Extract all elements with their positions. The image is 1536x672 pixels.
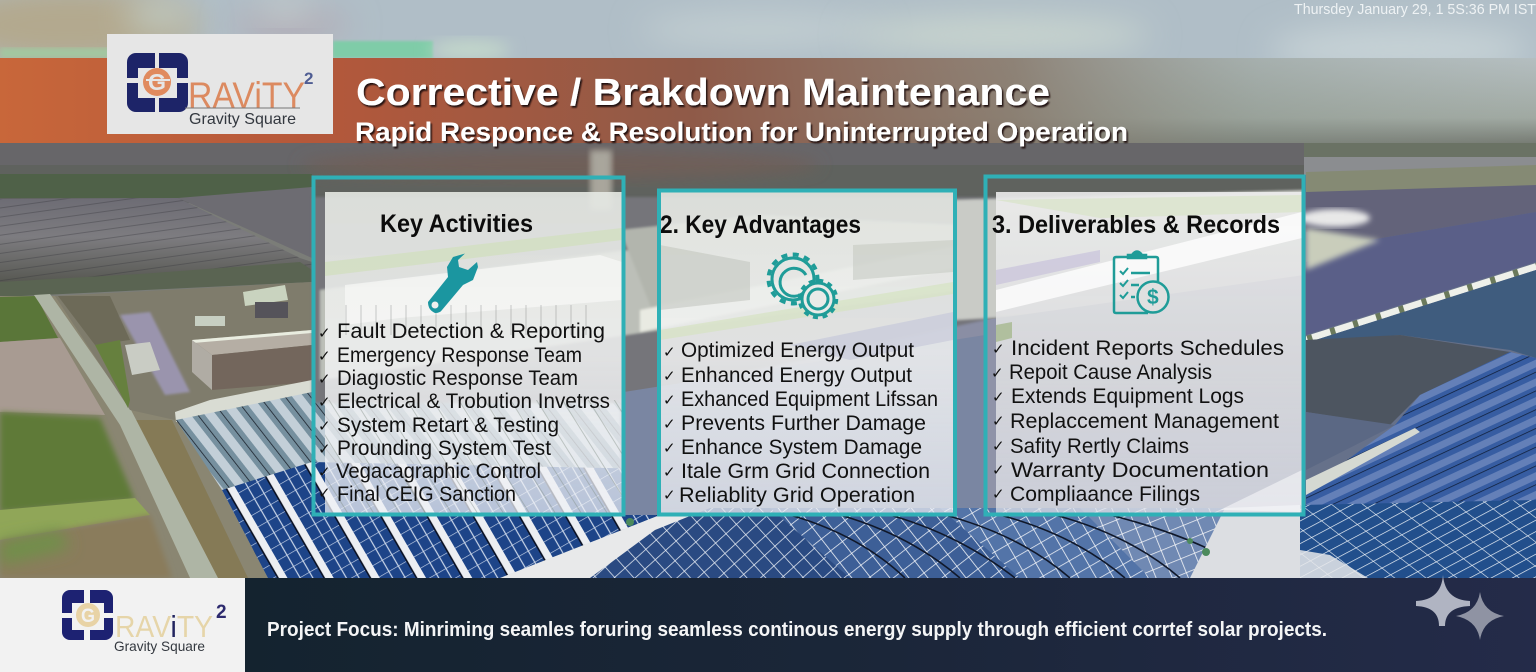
icon: clipboard with dollar: $ — [1147, 286, 1159, 309]
list: activities: ✓ — [318, 393, 331, 411]
list: advantages: Exhanced Equipment Lifssan — [681, 388, 938, 411]
list: activities: ✓ — [318, 324, 331, 342]
list: deliverables: ✓ — [992, 437, 1005, 455]
list: activities: ✓ — [318, 370, 331, 388]
panel: key advantages — [659, 190, 955, 514]
list: deliverables: Replaccement Management — [1010, 410, 1279, 433]
list: activities: Fault Detection & Reporting — [337, 320, 605, 343]
list: deliverables: ✓ — [992, 388, 1005, 406]
footer emblem — [62, 590, 113, 640]
list: activities: Diagıostic Response Team — [337, 367, 578, 390]
footer emblem: G — [81, 606, 95, 627]
icon: gears — [768, 254, 836, 318]
list: activities: System Retart & Testing — [337, 414, 559, 437]
logo name: Gravity Square — [189, 111, 296, 128]
list: deliverables: Extends Equipment Logs — [1011, 385, 1244, 408]
left crop fields — [0, 296, 320, 578]
list: advantages: Prevents Further Damage — [681, 412, 926, 435]
list: advantages: ✓ — [663, 391, 676, 409]
list: advantages: Enhanced Energy Output — [681, 364, 912, 387]
list: deliverables: Warranty Documentation — [1011, 459, 1269, 482]
right solar fields — [1300, 165, 1536, 578]
list: deliverables: Compliaance Filings — [1010, 483, 1200, 506]
list: deliverables: Incident Reports Schedules — [1011, 337, 1284, 360]
list: deliverables: ✓ — [991, 364, 1004, 382]
central buildings, washed — [312, 150, 1312, 470]
list: advantages: ✓ — [663, 439, 676, 457]
logo emblem — [127, 53, 188, 112]
list: advantages: ✓ — [663, 367, 676, 385]
logo wordmark: RAViTY — [188, 75, 305, 116]
list: deliverables: ✓ — [992, 461, 1005, 479]
panel: key activities — [314, 178, 624, 515]
panel: deliverables and records — [986, 176, 1304, 514]
solar rows, lower left — [176, 392, 700, 578]
logo superscript: 2 — [304, 69, 313, 88]
list: activities: ✓ — [318, 440, 331, 458]
heading: 3. Deliverables & Records — [992, 211, 1280, 239]
list: advantages — [663, 339, 938, 507]
icon: clipboard with dollar — [1114, 252, 1168, 313]
list: advantages: ✓ — [663, 415, 676, 433]
list: activities — [318, 320, 610, 506]
list: activities: ✓ — [318, 463, 331, 481]
list: activities: ✓ — [318, 417, 331, 435]
list: advantages: ✓ — [663, 343, 676, 361]
road — [34, 294, 218, 578]
list: deliverables — [991, 337, 1284, 506]
list: activities: Electrical & Trobution Invetrss — [337, 390, 610, 413]
title: Corrective / Brakdown Maintenance — [356, 72, 1050, 114]
list: deliverables: ✓ — [992, 485, 1005, 503]
sky — [0, 0, 1536, 75]
logo: top card — [107, 34, 333, 134]
title banner — [0, 58, 1536, 143]
list: advantages: Enhance System Damage — [681, 436, 922, 459]
far fields — [0, 58, 1536, 203]
footer wordmark: RAViTY — [115, 609, 213, 644]
list: activities: Emergency Response Team — [337, 344, 582, 367]
footer: project focus bar — [245, 575, 1536, 672]
compound and buildings — [55, 282, 312, 422]
list: activities: ✓ — [318, 484, 331, 502]
list: activities: Vegacagraphic Control — [336, 460, 541, 483]
list: advantages: ✓ — [663, 463, 676, 481]
list: advantages: Reliablity Grid Operation — [679, 484, 915, 507]
footer superscript: 2 — [216, 602, 227, 623]
heading: Key Activities — [380, 210, 533, 238]
solar fan, bottom centre — [500, 275, 1330, 578]
list: deliverables: Repoit Cause Analysis — [1009, 361, 1212, 384]
icon: wrench — [428, 254, 478, 313]
icon: sparkles — [1416, 575, 1504, 640]
footer: logo card — [0, 578, 245, 672]
list: advantages: Optimized Energy Output — [681, 339, 914, 362]
list: activities: Final CEIG Sanction — [337, 483, 516, 506]
footer name: Gravity Square — [114, 638, 205, 654]
list: deliverables: ✓ — [992, 412, 1005, 430]
list: deliverables: Safity Rertly Claims — [1010, 435, 1189, 458]
heading: 2. Key Advantages — [660, 211, 861, 239]
list: deliverables: ✓ — [992, 340, 1005, 358]
list: activities: Prounding System Test — [337, 437, 551, 460]
list: advantages: Itale Grm Grid Connection — [681, 460, 930, 483]
project focus text: Project Focus: Minriming seamles foruring seamless continous energy supply through efficient corrtef solar projects. — [267, 618, 1327, 641]
list: activities: ✓ — [318, 347, 331, 365]
logo emblem: G — [148, 69, 166, 95]
list: advantages: ✓ — [663, 486, 676, 504]
subtitle: Rapid Responce & Resolution for Uninterrupted Operation — [355, 117, 1128, 147]
grey panel fields, left — [0, 187, 312, 297]
